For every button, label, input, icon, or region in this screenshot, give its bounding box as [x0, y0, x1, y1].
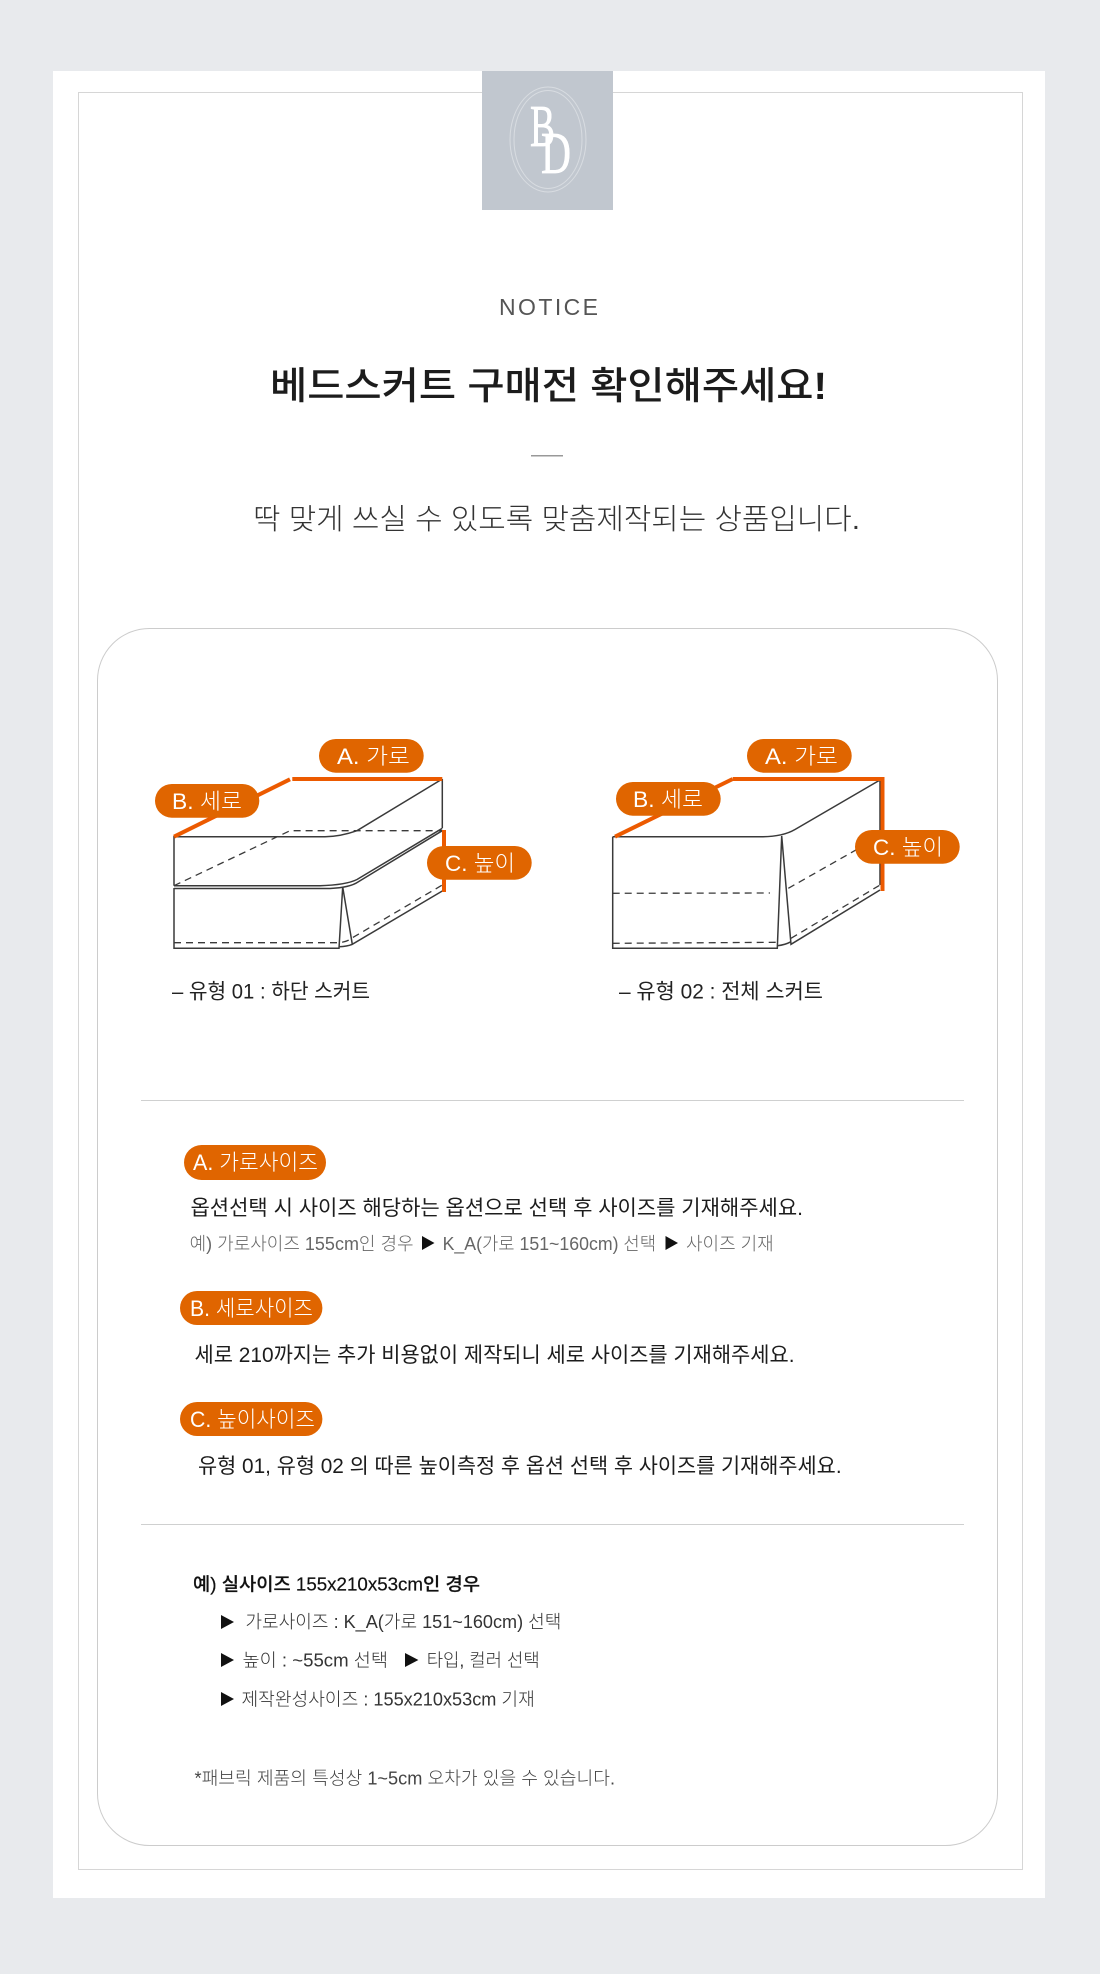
example A: 예) 가로사이즈 155cm인 경우: [190, 1234, 414, 1254]
pill: C: [427, 846, 532, 880]
caption: type 02: – 유형 02 : 전체 스커트: [619, 980, 823, 1004]
pill: C: [855, 830, 960, 864]
pill: B: [616, 782, 721, 816]
pill: A: A. 가로: [765, 744, 838, 769]
pill: A: [319, 739, 424, 773]
badge B: [180, 1291, 322, 1325]
text B: 세로 210까지는 추가 비용없이 제작되니 세로 사이즈를 기재해주세요.: [194, 1344, 794, 1367]
diagram: type 02 full skirt: [613, 739, 960, 948]
title: 베드스커트 구매전 확인해주세요 !: [270, 366, 827, 408]
example line 1: 가로사이즈 : K_A(가로 151~160cm) 선택: [245, 1612, 561, 1633]
pill: B: [155, 784, 259, 818]
logo badge: B: [530, 93, 555, 159]
pill: C: C. 높이: [445, 851, 515, 876]
badge B: B. 세로사이즈: [190, 1296, 313, 1321]
pill: B: B. 세로: [172, 789, 242, 814]
example line 3: 제작완성사이즈 : 155x210x53cm 기재: [242, 1690, 535, 1710]
inner frame: [78, 92, 1022, 1870]
example heading: 예) 실사이즈 155x210x53cm인 경우: [193, 1574, 480, 1594]
example A: [190, 1234, 774, 1255]
pill: B: B. 세로: [633, 787, 703, 812]
example line 2: 타입, 컬러 선택: [427, 1650, 540, 1670]
section C: height size: [180, 1402, 842, 1478]
text A: 옵션선택 시 사이즈 해당하는 옵션으로 선택 후 사이즈를 기재해주세요.: [190, 1197, 803, 1220]
logo badge: [482, 71, 613, 210]
notice label: NOTICE: [499, 294, 598, 320]
badge C: C. 높이사이즈: [190, 1407, 315, 1432]
example block: [193, 1574, 561, 1710]
diagram: type 01 lower skirt: [155, 739, 532, 948]
caption: type 01: – 유형 01 : 하단 스커트: [172, 980, 370, 1004]
logo badge: D: [541, 120, 571, 186]
section B: depth size: [180, 1291, 794, 1367]
example A: 사이즈 기재: [686, 1234, 774, 1254]
pill: A: A. 가로: [337, 744, 410, 769]
section A: width size: [184, 1145, 803, 1255]
pill: A: [747, 739, 852, 773]
example A: K_A(가로 151~160cm) 선택: [443, 1234, 656, 1255]
example line 2: 높이 : ~55cm 선택: [242, 1650, 388, 1670]
short divider: [531, 455, 563, 456]
subtitle: 딱 맞게 쓰실 수 있도록 맞춤제작되는 상품입니다.: [253, 504, 860, 536]
badge C: [180, 1402, 322, 1436]
footnote: *패브릭 제품의 특성상 1~5cm 오차가 있을 수 있습니다.: [194, 1768, 615, 1788]
text C: 유형 01, 유형 02 의 따른 높이측정 후 옵션 선택 후 사이즈를 기재해주세요.: [198, 1455, 842, 1478]
example line 2: [221, 1650, 540, 1670]
rounded panel: [98, 628, 998, 1846]
pill: C: C. 높이: [873, 835, 943, 860]
badge A: A. 가로사이즈: [193, 1150, 318, 1175]
badge A: [184, 1145, 326, 1180]
